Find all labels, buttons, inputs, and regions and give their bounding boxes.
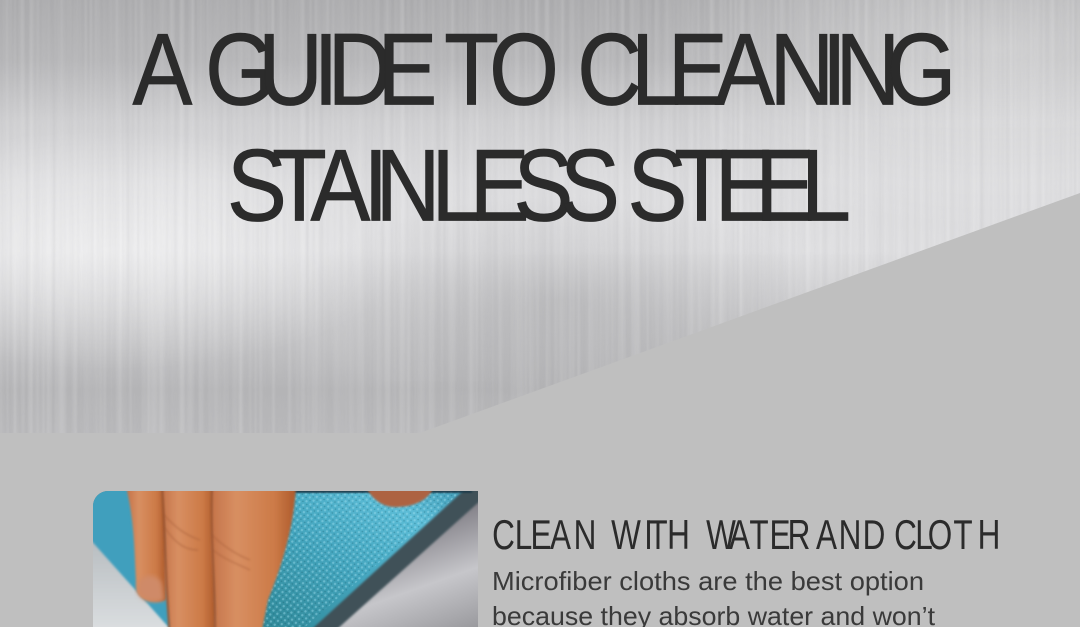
title: L: [801, 129, 851, 243]
step heading: A: [816, 511, 837, 558]
title: L: [631, 13, 681, 127]
title: S: [227, 129, 287, 243]
step heading: L: [515, 511, 532, 558]
step heading: H: [667, 511, 690, 558]
step heading: A: [729, 511, 750, 558]
title: I: [314, 13, 338, 127]
title: T: [674, 129, 729, 243]
title: S: [628, 129, 687, 243]
steel surface, left: [93, 541, 169, 627]
title: O: [489, 13, 559, 127]
title: E: [668, 13, 728, 127]
title: E: [470, 129, 530, 243]
middle finger: [162, 485, 216, 627]
title: L: [431, 129, 481, 243]
cloth texture: [262, 491, 462, 627]
title: D: [328, 13, 392, 127]
step heading: W: [706, 511, 736, 558]
title: N: [836, 13, 900, 127]
title: E: [755, 129, 815, 243]
brushed steel header: [0, 0, 1080, 433]
title: T: [444, 13, 499, 127]
title: N: [376, 129, 440, 243]
step heading: L: [915, 511, 933, 558]
step heading: I: [644, 511, 653, 558]
title: S: [513, 129, 573, 243]
title: I: [363, 129, 388, 243]
step body text: [492, 566, 936, 627]
title: I: [822, 13, 847, 127]
title: G: [887, 13, 956, 127]
step heading: T: [749, 511, 769, 558]
step heading: E: [530, 511, 551, 558]
title: E: [378, 13, 437, 127]
step heading: H: [978, 511, 1000, 558]
step heading: D: [863, 511, 885, 558]
step heading: N: [574, 511, 596, 558]
index finger: [211, 485, 296, 627]
title: A: [310, 129, 370, 243]
step body text: Microfiber cloths are the best option: [492, 566, 924, 596]
step heading: E: [770, 511, 791, 558]
little finger: [127, 485, 166, 602]
step heading: N: [839, 511, 861, 558]
little finger tip: [137, 576, 164, 602]
title: S: [560, 129, 620, 243]
title: E: [715, 129, 775, 243]
step heading: T: [953, 511, 973, 558]
step heading: A: [550, 511, 571, 558]
cloth, left piece: [93, 491, 171, 627]
cloth shadow edge: [312, 491, 478, 627]
title: T: [272, 129, 327, 243]
finger gaps: [162, 485, 215, 627]
title: [133, 13, 956, 243]
steel surface: [93, 491, 478, 627]
title: A: [715, 13, 775, 127]
step heading: R: [788, 511, 810, 558]
step heading: C: [894, 511, 917, 558]
dark top strip: [294, 491, 472, 494]
step heading: T: [648, 511, 668, 558]
step heading: O: [928, 511, 952, 558]
step heading: C: [492, 511, 515, 558]
title: C: [577, 13, 642, 127]
title: U: [258, 13, 323, 127]
photo: hand wiping steel with microfiber cloth: [93, 491, 478, 627]
title: G: [205, 13, 275, 127]
title: N: [770, 13, 834, 127]
cloth, right piece: [261, 492, 462, 627]
step heading: W: [611, 511, 641, 558]
thumb: [366, 491, 434, 508]
knuckle creases: [164, 515, 250, 570]
title: A: [133, 13, 192, 127]
